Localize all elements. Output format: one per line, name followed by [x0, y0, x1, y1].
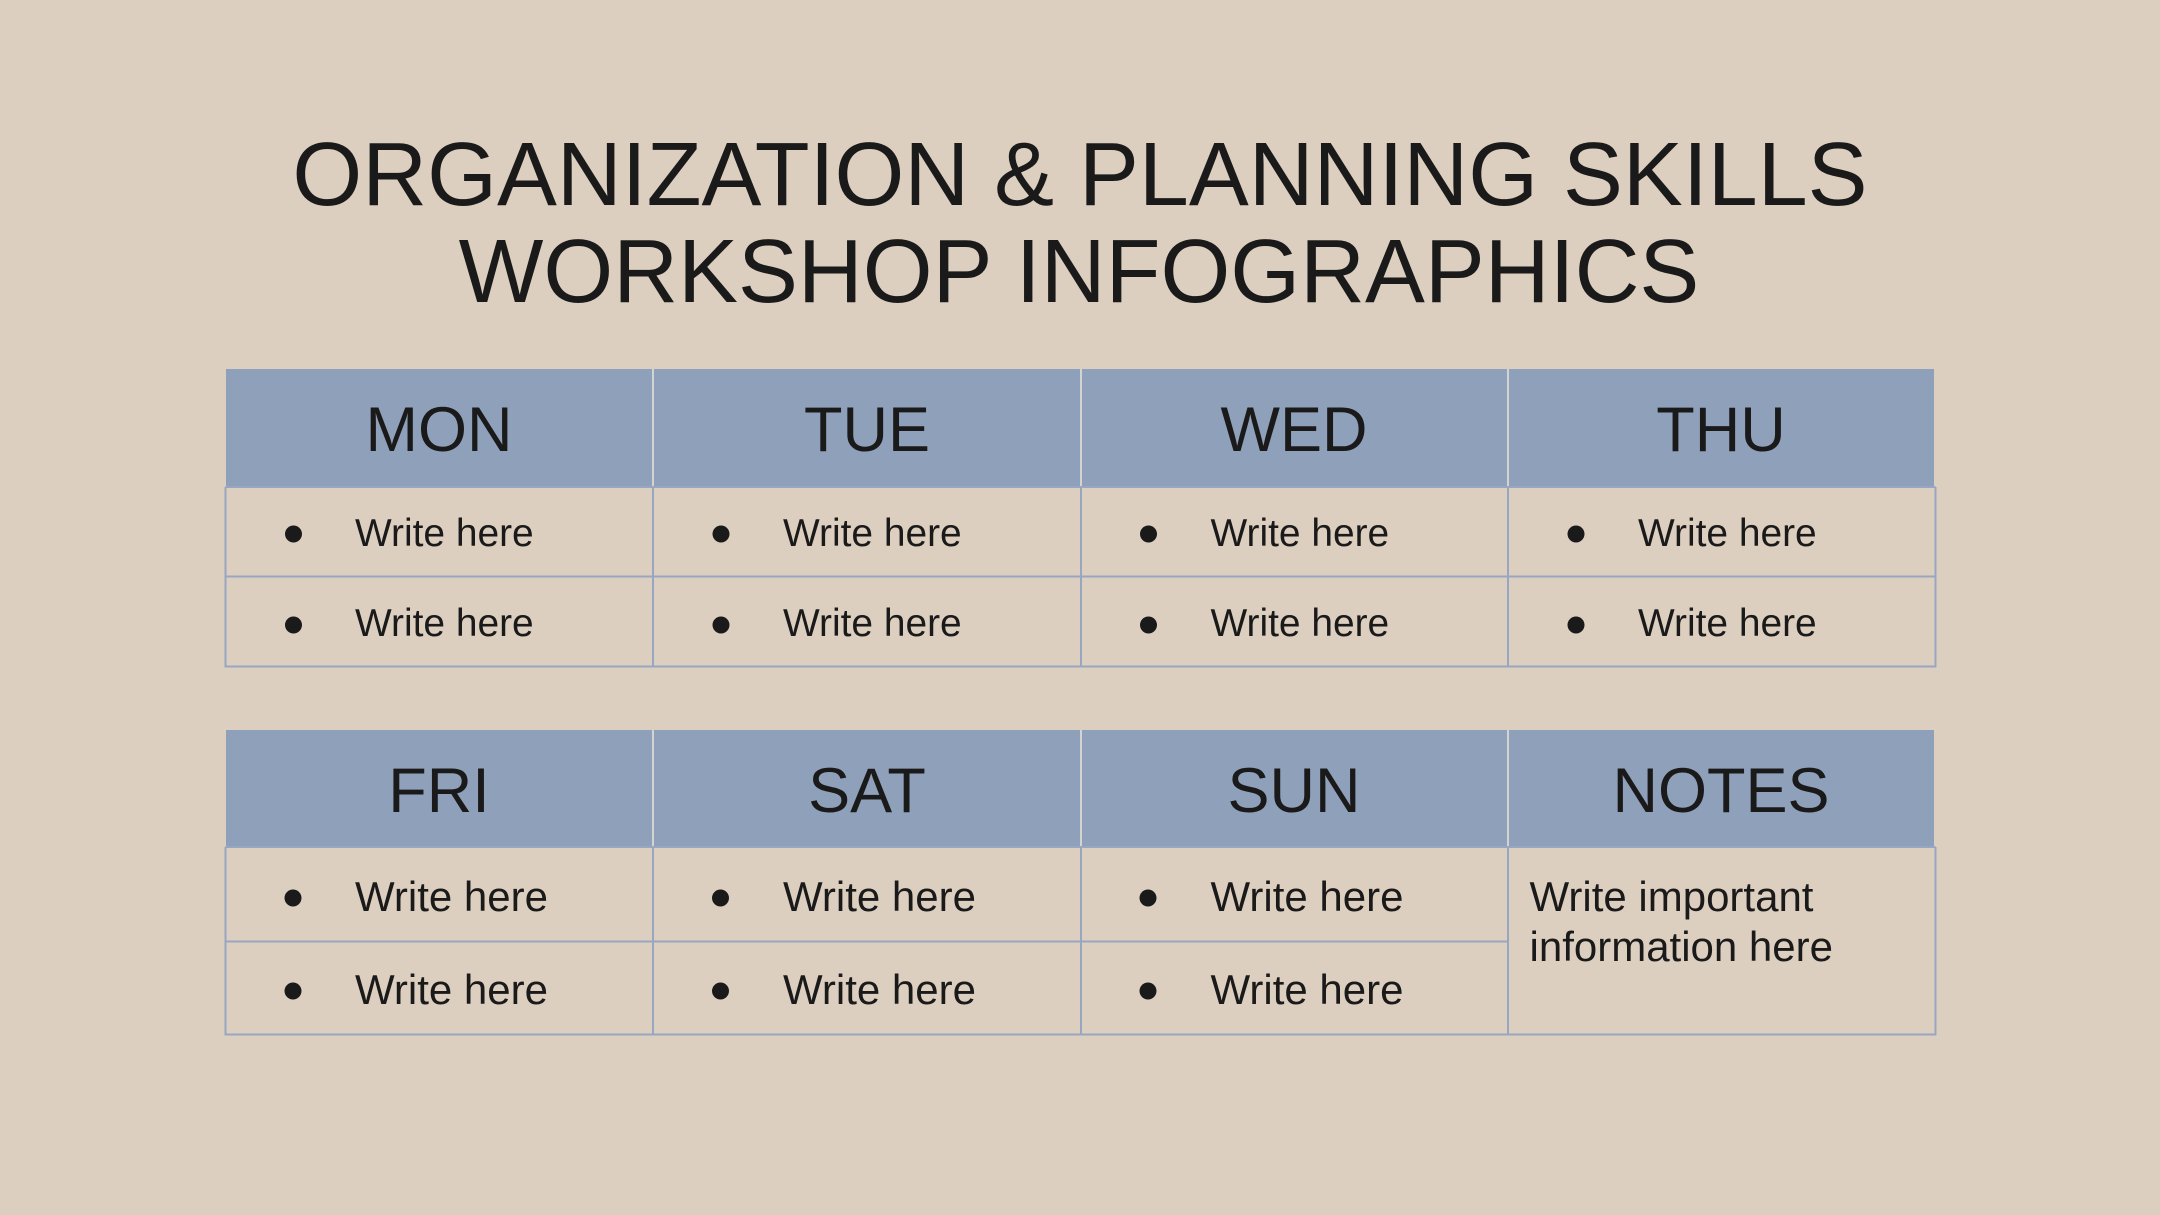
- grid lines: top table: [226, 487, 1936, 666]
- column: SAT: [712, 756, 976, 1013]
- grid lines: bottom table: [226, 847, 1936, 1034]
- column: WED: Write here: [1210, 512, 1389, 555]
- column: SAT: Write here: [783, 873, 976, 920]
- column: NOTES: NOTES: [1612, 756, 1830, 826]
- column: MON: [285, 395, 534, 645]
- column: TUE: [712, 395, 962, 645]
- panel: top schedule table: [226, 369, 1936, 666]
- column: SUN: Write here: [1210, 966, 1403, 1013]
- column: FRI: Write here: [355, 966, 548, 1013]
- column: TUE: Write here: [783, 512, 962, 555]
- column: THU: THU: [1656, 395, 1786, 465]
- column: NOTES: Write important: [1530, 873, 1814, 920]
- column: SAT: Write here: [783, 966, 976, 1013]
- column: FRI: FRI: [388, 756, 490, 826]
- column: FRI: Write here: [355, 873, 548, 920]
- column: SUN: [1140, 756, 1403, 1013]
- column: TUE: Write here: [783, 602, 962, 645]
- column: WED: [1140, 395, 1389, 645]
- header band: top table: [226, 369, 1934, 487]
- column: SUN: SUN: [1227, 756, 1361, 826]
- column: SAT: SAT: [808, 756, 926, 826]
- header band: bottom table: [226, 730, 1934, 847]
- title: ORGANIZATION & PLANNING SKILLS: [292, 125, 1868, 225]
- column: WED: Write here: [1210, 602, 1389, 645]
- column: SUN: Write here: [1210, 873, 1403, 920]
- panel: bottom schedule table: [226, 730, 1936, 1034]
- column: THU: Write here: [1638, 602, 1817, 645]
- column: MON: MON: [366, 395, 512, 465]
- column: NOTES: [1530, 756, 1833, 970]
- title: [292, 125, 1868, 322]
- column: MON: Write here: [355, 602, 534, 645]
- column: THU: Write here: [1638, 512, 1817, 555]
- column: WED: WED: [1221, 395, 1367, 465]
- column: NOTES: information here: [1530, 923, 1833, 970]
- column: FRI: [284, 756, 548, 1013]
- column: THU: [1568, 395, 1817, 645]
- column: MON: Write here: [355, 512, 534, 555]
- column: TUE: TUE: [804, 395, 930, 465]
- title: WORKSHOP INFOGRAPHICS: [459, 222, 1699, 322]
